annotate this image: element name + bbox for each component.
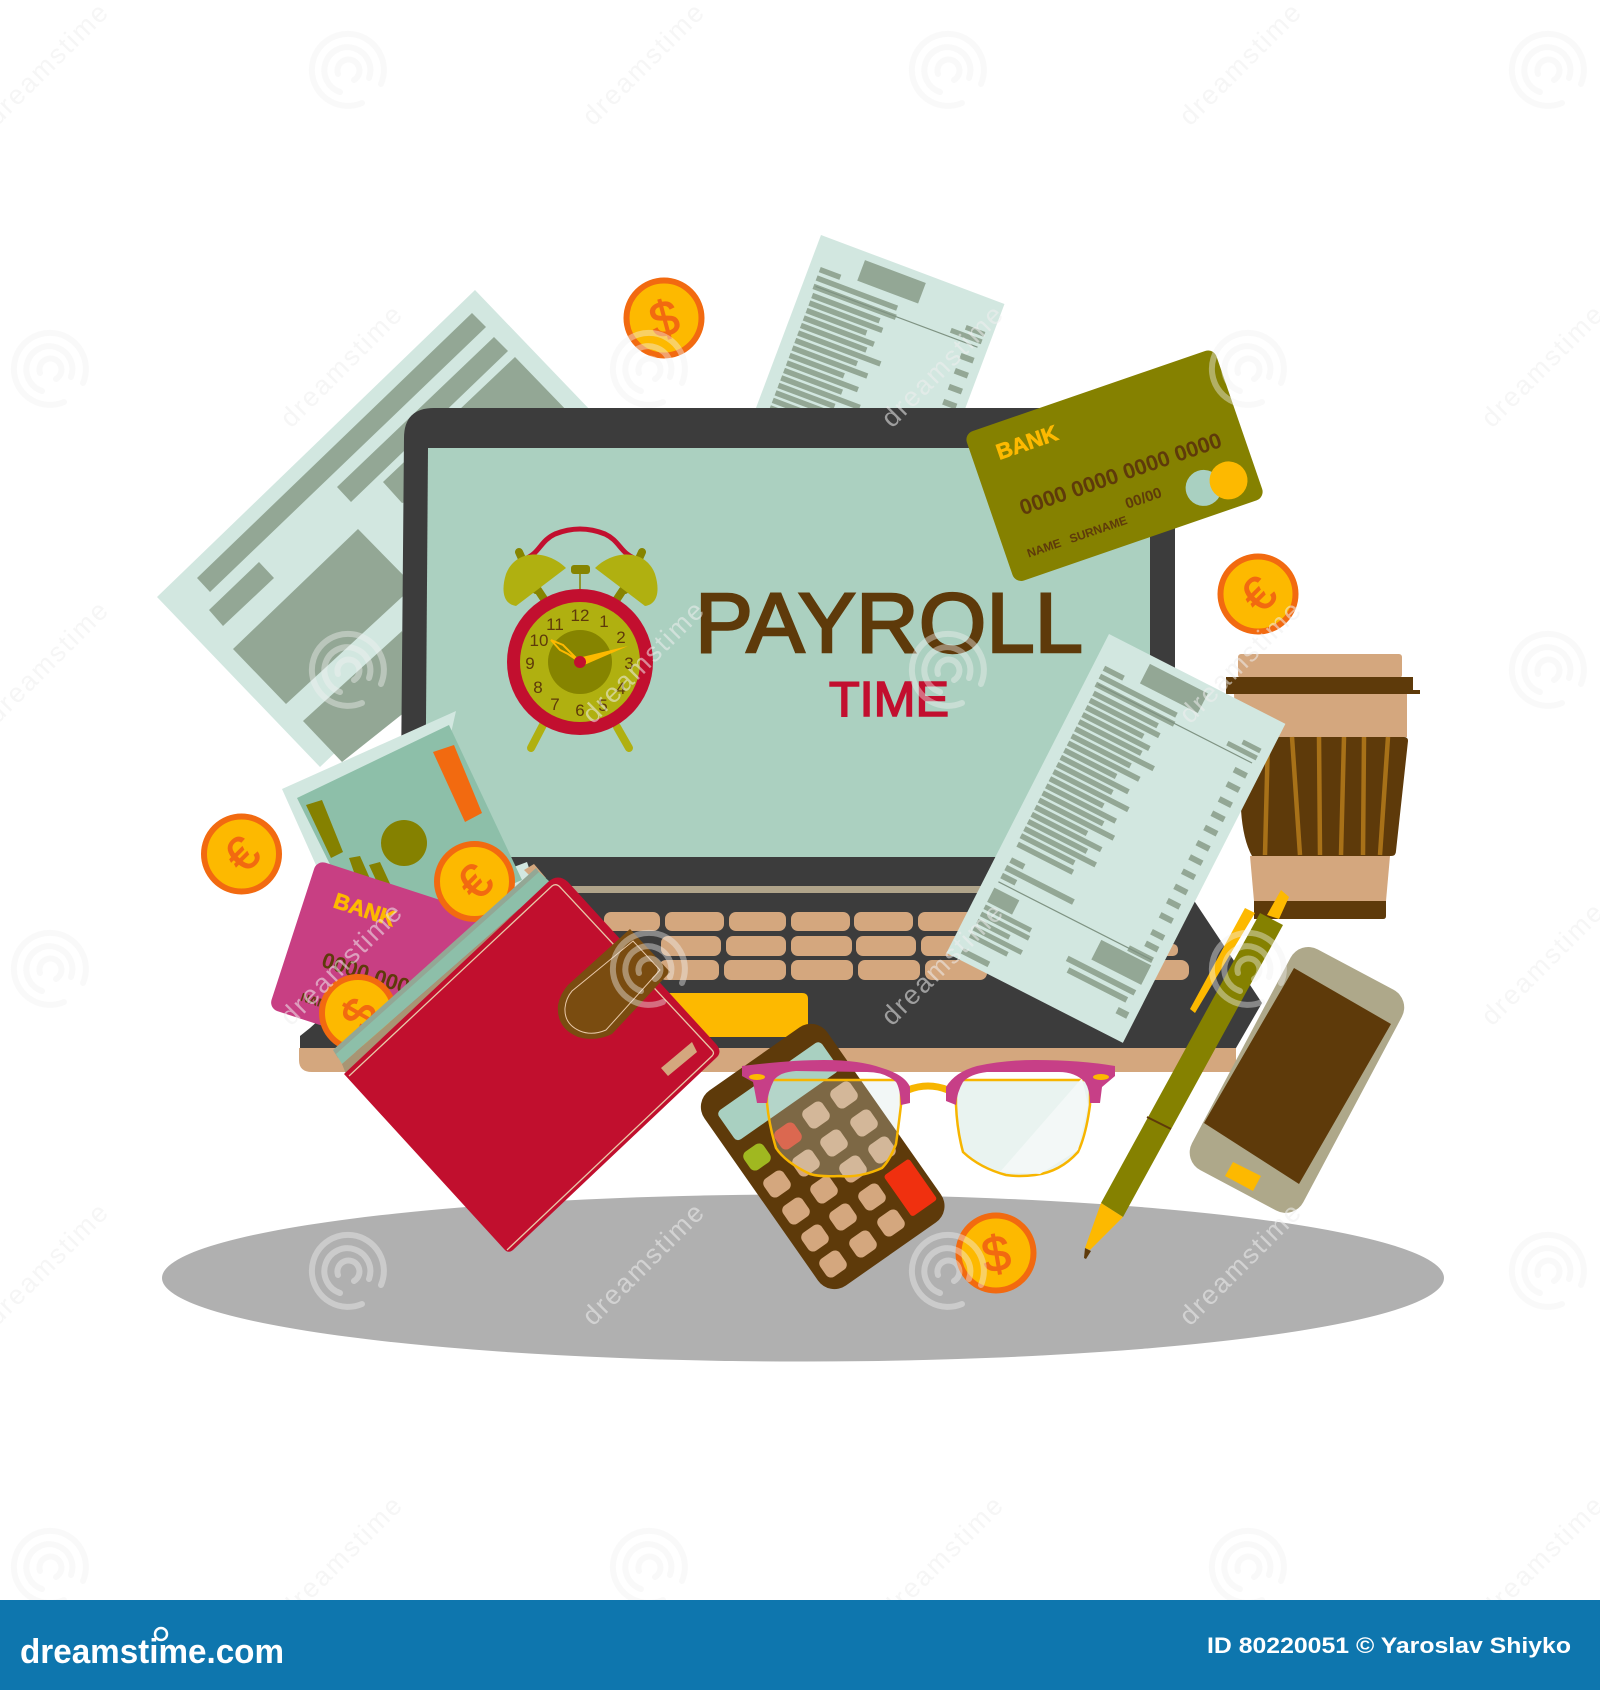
watermark text: dreamstime	[875, 1489, 1010, 1624]
coin: euro right: €	[1231, 567, 1287, 623]
coffee cup	[1226, 654, 1420, 919]
green bank card	[964, 348, 1265, 583]
laptop base	[299, 1048, 1236, 1072]
coin: euro right	[1220, 556, 1296, 632]
green bank card: 0000 0000 0000 0000	[1016, 427, 1225, 520]
coin: dollar bottom: $	[978, 1224, 1015, 1284]
footer credit: ID 80220051 © Yaroslav Shiyko	[1207, 1633, 1571, 1658]
watermark text: dreamstime	[1173, 0, 1308, 131]
phone button	[1225, 1162, 1261, 1191]
watermark text: dreamstime	[875, 298, 1010, 433]
touchpad	[660, 993, 808, 1037]
pen	[1084, 890, 1289, 1259]
clock face	[507, 589, 653, 735]
clock hands	[578, 646, 628, 666]
alarm clock	[503, 529, 658, 748]
alarm clock: 3	[624, 654, 634, 673]
bridge	[908, 1086, 948, 1090]
watermark text: dreamstime	[274, 1489, 409, 1624]
alarm clock: 8	[533, 678, 543, 697]
watermark text: dreamstime	[875, 896, 1010, 1031]
alarm clock: 4	[616, 679, 626, 698]
watermark text: dreamstime	[576, 594, 711, 729]
green bank card: NAME SURNAME	[1025, 513, 1129, 560]
bells	[503, 554, 566, 606]
coin: dollar top	[626, 280, 702, 356]
coin: euro left: €	[214, 827, 271, 883]
alarm clock: 1	[599, 612, 609, 631]
alarm clock: 7	[550, 695, 560, 714]
alarm clock: 9	[525, 654, 535, 673]
banknote	[282, 711, 540, 960]
smartphone	[1183, 940, 1411, 1220]
wallet label	[661, 1042, 697, 1076]
alarm clock: 5	[598, 696, 608, 715]
watermark text: dreamstime	[274, 298, 409, 433]
alarm clock: 2	[616, 628, 626, 647]
watermark text: dreamstime	[274, 896, 409, 1031]
footer logo: dreamstime.com	[20, 1633, 284, 1671]
shadow ellipse	[162, 1194, 1444, 1362]
coin: dollar at wallet: $	[330, 989, 388, 1038]
screen bezel	[400, 408, 1175, 890]
alarm clock: 11	[546, 615, 564, 634]
upper receipt	[695, 235, 1004, 639]
green bank card: BANK	[993, 420, 1061, 465]
subtitle: TIME: TIME	[829, 673, 949, 727]
screen	[425, 448, 1150, 857]
calculator	[693, 1016, 952, 1297]
alarm clock: 6	[575, 701, 585, 720]
left frame	[742, 1060, 910, 1105]
keyboard deck	[300, 893, 1262, 1048]
coin: euro centre	[437, 844, 512, 919]
calculator keys	[741, 1079, 937, 1280]
coin: dollar bottom	[958, 1216, 1034, 1290]
large document	[157, 290, 640, 767]
watermark text: dreamstime	[576, 0, 711, 131]
glasses	[742, 1060, 1115, 1176]
coin: euro left	[204, 816, 279, 892]
left lens	[767, 1080, 901, 1176]
calculator screen	[716, 1040, 840, 1142]
title: PAYROLL: PAYROLL	[695, 576, 1083, 670]
green bank card: 00/00	[1123, 484, 1164, 513]
wallet contents	[333, 864, 556, 1074]
footer bar	[0, 1600, 1600, 1690]
pink bank card	[269, 860, 536, 1079]
alarm clock: 10	[530, 631, 548, 650]
right lens	[956, 1080, 1090, 1176]
wallet strap	[558, 929, 670, 1039]
clock handle	[525, 529, 636, 559]
coin: dollar top: $	[644, 288, 685, 350]
lower receipt	[946, 634, 1285, 1043]
coin: euro centre: €	[447, 854, 504, 911]
alarm clock: 12	[571, 606, 589, 625]
watermark text: dreamstime	[1173, 594, 1308, 729]
right frame	[946, 1060, 1115, 1105]
keyboard keys	[604, 912, 1189, 980]
wallet	[344, 878, 720, 1252]
pink bank card: 0000 000	[319, 947, 413, 999]
watermark text: dreamstime	[1173, 1196, 1308, 1331]
watermark text: dreamstime	[576, 1196, 711, 1331]
pink bank card: BANK	[331, 888, 399, 931]
laptop	[299, 408, 1262, 1072]
pink bank card: NAME	[299, 990, 337, 1014]
cup sleeve	[1241, 737, 1408, 856]
phone screen	[1204, 968, 1391, 1184]
coin: dollar at wallet	[322, 977, 394, 1049]
feet	[531, 725, 629, 748]
